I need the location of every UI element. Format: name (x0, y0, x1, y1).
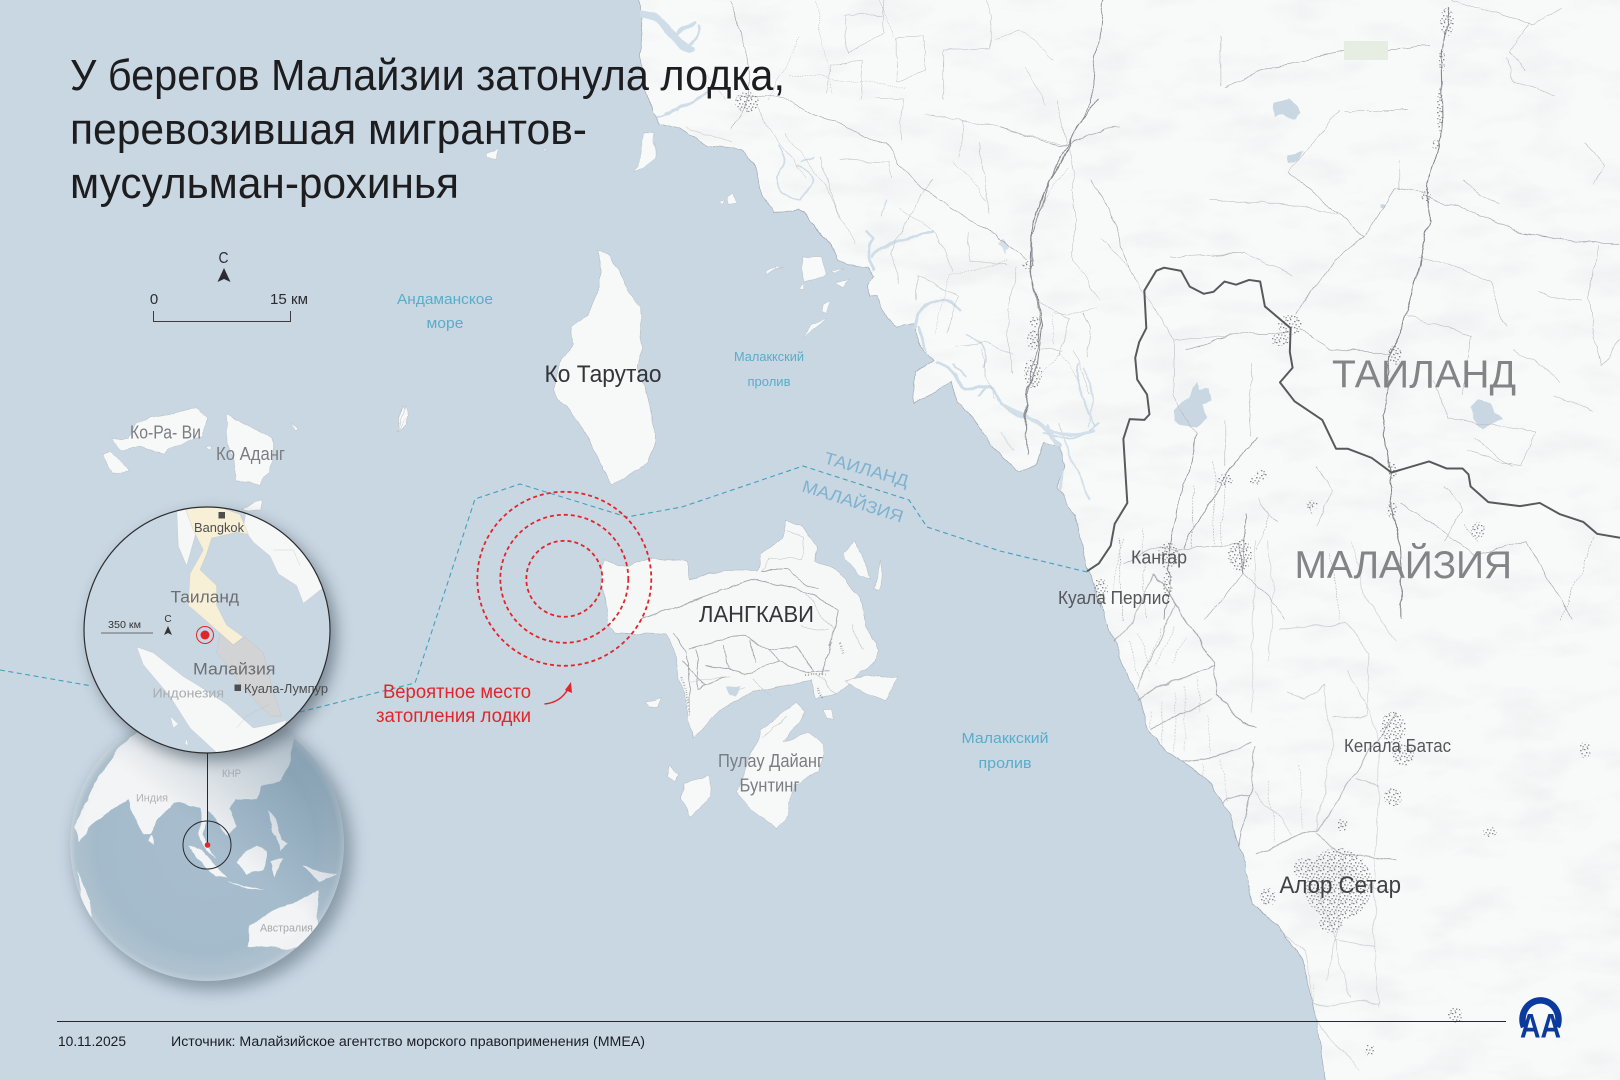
city labels (1058, 548, 1451, 899)
sea labels: пролив (978, 755, 1032, 772)
inset labels (152, 512, 328, 700)
scale bar and north arrow: С (218, 250, 228, 267)
locator globe (70, 707, 352, 990)
island: Langkawi group (601, 519, 898, 829)
inset scale bar: С (164, 614, 172, 625)
title: перевозившая мигрантов- (70, 105, 587, 154)
callout: probable sinking site: Вероятное место (383, 682, 531, 703)
city labels: Куала Перлис (1058, 588, 1170, 608)
mainland (638, 0, 1620, 1080)
lakes (1174, 101, 1504, 429)
island labels: Ко Аданг (216, 444, 285, 464)
country labels: МАЛАЙЗИЯ (1294, 542, 1512, 587)
country labels (1294, 354, 1516, 587)
inset rim (84, 507, 330, 753)
footer date: 10.11.2025 (58, 1034, 126, 1049)
sea labels: Андаманское (397, 291, 493, 308)
callout: probable sinking site: затопления лодки (376, 706, 531, 727)
maritime boundary (0, 466, 1087, 712)
leader line to globe (205, 753, 210, 848)
globe labels: Австралия (260, 922, 313, 934)
inset labels: Bangkok (194, 520, 244, 535)
sinking location rings (477, 492, 651, 666)
urban stipple (735, 8, 1591, 1056)
inset locator map (84, 507, 336, 760)
title (70, 51, 785, 208)
inset labels: Куала-Лумпур (244, 681, 328, 696)
globe labels (136, 768, 313, 934)
scale bar and north arrow (150, 250, 308, 322)
sea labels (397, 291, 1048, 772)
sea labels: море (426, 315, 464, 332)
globe labels: КНР (222, 768, 241, 780)
park patch (1344, 41, 1388, 60)
title: У берегов Малайзии затонула лодка, (70, 51, 785, 100)
inset labels: Малайзия (193, 660, 276, 678)
inset scale bar (101, 614, 172, 635)
globe shadow (74, 712, 352, 990)
inset shadow (90, 514, 336, 760)
rivers and estuaries, northwest (640, 13, 1100, 447)
inset location marker (196, 626, 214, 644)
island labels: Ко-Ра- Ви (130, 422, 201, 442)
sea labels: Малаккский (734, 350, 804, 364)
city labels: Алор Сетар (1280, 872, 1401, 899)
small northern islands (487, 133, 848, 337)
road network south (1076, 540, 1397, 1080)
country labels: ТАИЛАНД (1332, 354, 1516, 396)
callout: probable sinking site (376, 682, 572, 727)
road network central (1000, 0, 1620, 620)
globe land masses (73, 728, 337, 949)
globe locator ring (183, 821, 231, 869)
globe labels: Индия (136, 792, 168, 804)
island: Ko Tarutao (397, 250, 654, 487)
footer rule (57, 1021, 1506, 1022)
arrow to rings (544, 682, 572, 704)
inset scale bar: 350 км (108, 619, 141, 631)
city labels: Кепала Батас (1344, 736, 1451, 756)
scale bar and north arrow: 15 км (270, 291, 308, 308)
scale bar and north arrow: 0 (150, 291, 158, 308)
island labels: ЛАНГКАВИ (699, 601, 814, 627)
rivers, Perlis estuary (1000, 241, 1095, 498)
title: мусульман-рохинья (70, 159, 459, 208)
island labels: Бунтинг (740, 776, 800, 796)
maritime boundary labels: ТАИЛАНД (822, 449, 911, 491)
island labels: Ко Тарутао (544, 361, 662, 388)
island labels: Пулау Дайанг (718, 751, 823, 771)
island: Ko-Ra-Vi and Ko Adang group (102, 406, 410, 510)
maritime boundary labels: МАЛАЙЗИЯ (800, 477, 906, 526)
land border (1087, 268, 1620, 571)
sea labels: пролив (748, 375, 791, 389)
inset labels: Индонезия (152, 686, 224, 700)
footer source: Источник: Малайзийское агентство морского правоприменения (MMEA) (171, 1034, 645, 1049)
maritime boundary labels (800, 449, 911, 526)
city labels: Кангар (1131, 548, 1187, 568)
inset labels: Таиланд (170, 588, 239, 606)
island labels (130, 361, 823, 796)
road network north (687, 0, 1100, 433)
logo: Anadolu Agency: AA (1520, 1008, 1561, 1046)
sea labels: Малаккский (962, 730, 1048, 747)
inset land (137, 507, 333, 756)
